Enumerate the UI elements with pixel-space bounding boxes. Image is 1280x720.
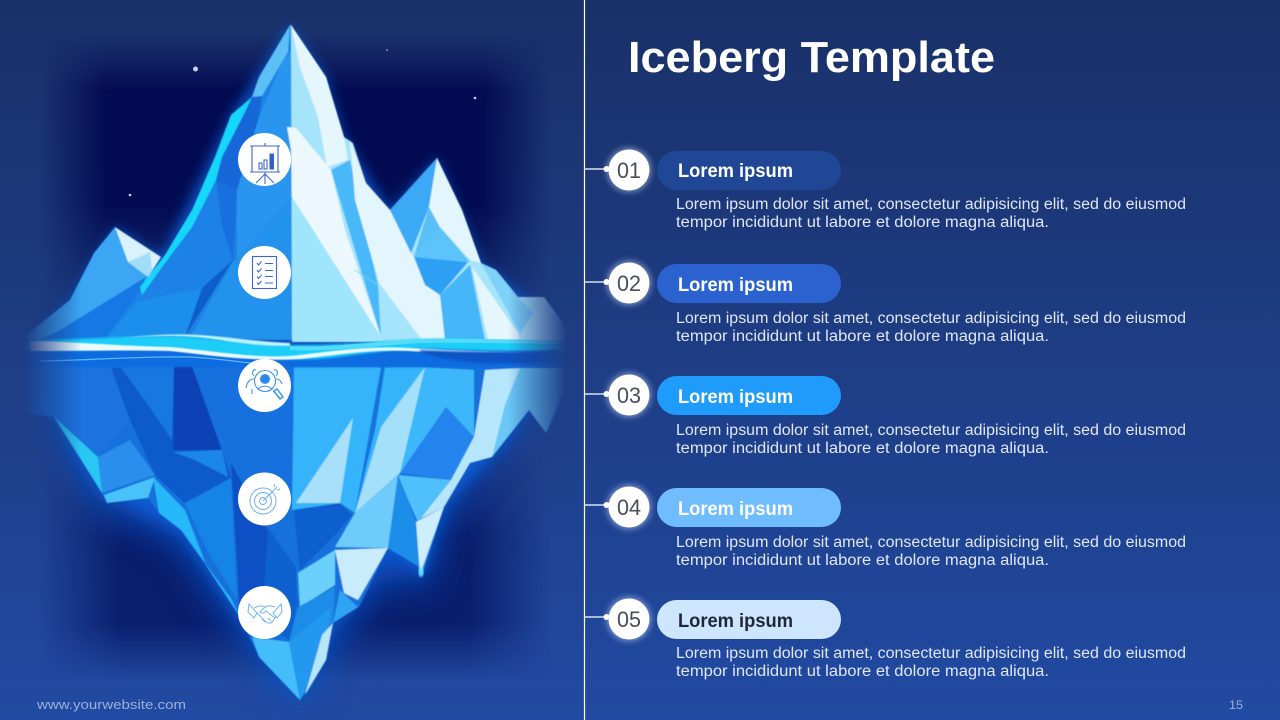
icon: presentation chart [238, 133, 291, 186]
vertical divider line [584, 0, 586, 720]
left small peak [20, 227, 150, 340]
iceberg above water [20, 25, 566, 342]
left lower facets [111, 368, 130, 420]
page number: 15 [1229, 700, 1243, 712]
icon: people search [238, 359, 291, 412]
item 05: tempor incididunt ut labore et dolore magna aliqua. [676, 663, 1049, 680]
item 05: 05 [617, 607, 641, 632]
item 04 [585, 484, 1186, 569]
main left body [105, 25, 292, 340]
cyan rim [140, 97, 252, 295]
night sky and deep water backdrop [40, 35, 550, 680]
icon: handshake [238, 586, 291, 639]
iceberg glow [45, 22, 534, 704]
upper left facets [252, 25, 290, 98]
item 02: Lorem ipsum [678, 275, 793, 296]
item 02 [585, 260, 1186, 345]
item 04: Lorem ipsum [678, 499, 793, 520]
item 01: tempor incididunt ut labore et dolore magna aliqua. [676, 214, 1049, 231]
item 02: Lorem ipsum dolor sit amet, consectetur adipisicing elit, sed do eiusmod [676, 310, 1186, 327]
item 04: tempor incididunt ut labore et dolore magna aliqua. [676, 552, 1049, 569]
glow at lower ice tip [418, 567, 424, 577]
item 02: 02 [617, 271, 641, 296]
item 01: Lorem ipsum dolor sit amet, consectetur adipisicing elit, sed do eiusmod [676, 196, 1186, 213]
iceberg below water [20, 360, 573, 700]
item 04: 04 [617, 495, 641, 520]
right side main [291, 25, 566, 342]
item 03 [585, 372, 1186, 457]
item 01: 01 [617, 158, 641, 183]
title: Iceberg Template [628, 33, 995, 82]
item 05 [585, 596, 1186, 680]
water surface [10, 334, 570, 367]
right medium peak [390, 158, 437, 253]
right lower facets [292, 367, 381, 513]
item 01: Lorem ipsum [678, 161, 793, 182]
iceberg illustration [10, 25, 573, 700]
footer website: www.yourwebsite.com [36, 697, 186, 712]
item 03: Lorem ipsum [678, 387, 793, 408]
item 03: 03 [617, 383, 641, 408]
stars [129, 49, 476, 196]
item 05: Lorem ipsum [678, 611, 793, 632]
item 03: tempor incididunt ut labore et dolore magna aliqua. [676, 440, 1049, 457]
item 03: Lorem ipsum dolor sit amet, consectetur adipisicing elit, sed do eiusmod [676, 422, 1186, 439]
item 04: Lorem ipsum dolor sit amet, consectetur adipisicing elit, sed do eiusmod [676, 534, 1186, 551]
item 01 [585, 148, 1186, 231]
item 02: tempor incididunt ut labore et dolore magna aliqua. [676, 328, 1049, 345]
icon: target [238, 472, 291, 526]
item 05: Lorem ipsum dolor sit amet, consectetur adipisicing elit, sed do eiusmod [676, 645, 1186, 662]
icon: checklist [238, 246, 291, 299]
